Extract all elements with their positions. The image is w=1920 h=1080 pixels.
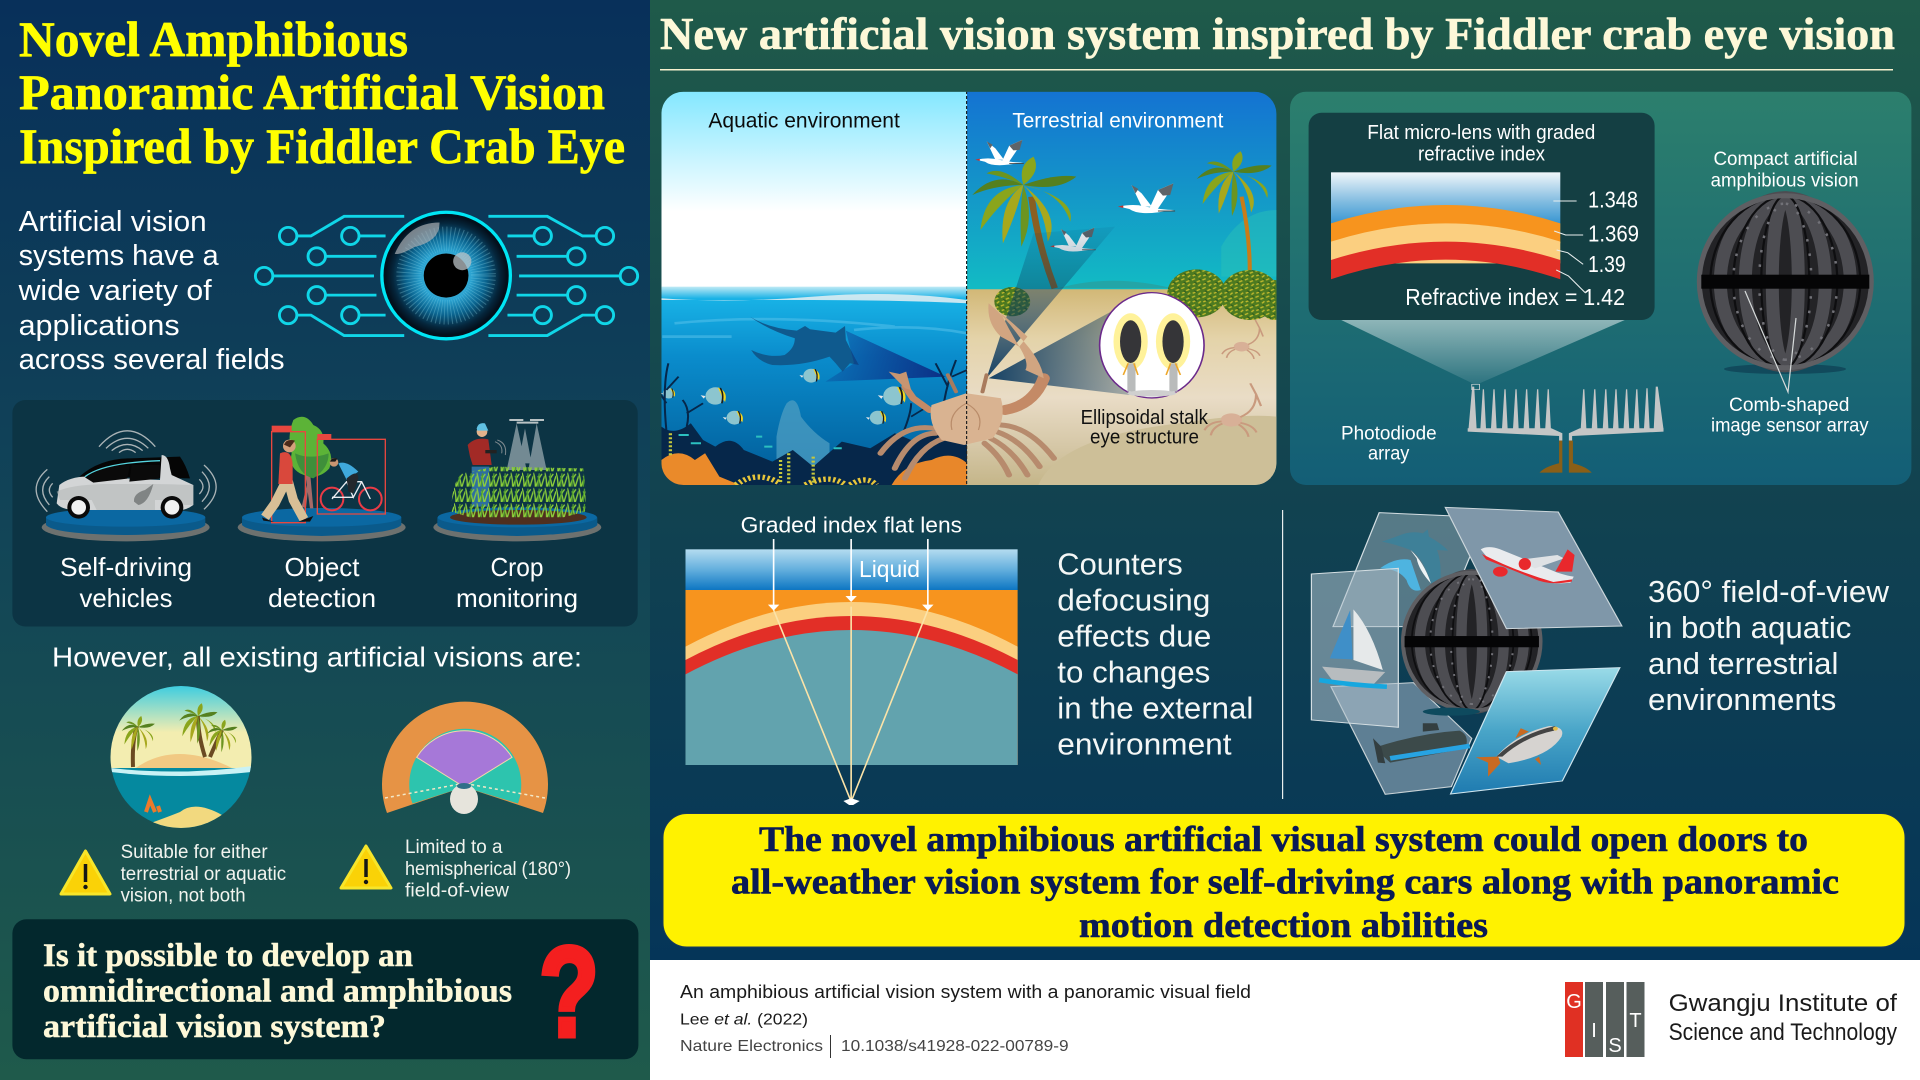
label: flat micro-lens [1367, 122, 1595, 166]
title [19, 11, 625, 174]
citation: Nature Electronics [680, 1038, 823, 1055]
intro text: systems have a [19, 240, 219, 272]
text: 360 field of view: environments [1648, 682, 1836, 717]
text: warning 2: hemispherical (180°) [405, 859, 571, 880]
small crabs [1204, 320, 1263, 437]
logo: GIST [1565, 982, 1644, 1057]
icon: self-driving car [36, 431, 216, 541]
lens layers [1331, 172, 1585, 293]
label: comb-shaped: Comb-shaped [1729, 395, 1849, 416]
fiddler crab [881, 303, 1054, 478]
central sphere [1401, 571, 1542, 712]
intro text: wide variety of [18, 275, 213, 307]
view: plane [1445, 507, 1622, 629]
text: warning 1: vision, not both [121, 886, 246, 906]
bushes [994, 269, 1291, 320]
label: photodiode array [1341, 424, 1437, 464]
label: crop monitoring: monitoring [456, 583, 578, 613]
citation: Lee et al. (2022) [680, 1012, 808, 1028]
text: 360 field of view: and terrestrial [1648, 646, 1838, 681]
text: warning 2 [405, 837, 571, 902]
panel: aquatic and terrestrial scene [658, 91, 1291, 487]
label: aquatic environment: Aquatic environment [708, 110, 900, 132]
refractive index values: 1.348 [1588, 186, 1638, 212]
title: Novel Amphibious [19, 11, 408, 67]
callout: conclusion banner [663, 814, 1905, 947]
intro text [18, 206, 285, 376]
icon: crop monitoring [433, 420, 601, 541]
sky: terrestrial side [967, 92, 1277, 292]
chart: hemispherical field of view [382, 702, 548, 814]
text: warning 2: Limited to a [405, 837, 503, 858]
label: photodiode array: Photodiode [1341, 424, 1437, 444]
logo: GIST: S [1608, 1035, 1622, 1057]
text: counters defocusing: environment [1057, 726, 1232, 762]
refractive index values: 1.39 [1588, 251, 1626, 277]
label: liquid: Liquid [859, 556, 920, 582]
label: flat micro-lens: Flat micro-lens with graded [1367, 122, 1595, 144]
view: dolphin [1333, 513, 1486, 627]
view: fish [1451, 668, 1620, 794]
label: graded index: Graded index flat lens [741, 513, 962, 538]
text: counters defocusing: defocusing [1057, 582, 1210, 618]
citation [680, 982, 1251, 1058]
text: warning 1: terrestrial or aquatic [121, 864, 286, 885]
citation: 10.1038/s41928-022-00789-9 [841, 1038, 1069, 1055]
label: terrestrial environment: Terrestrial environment [1012, 110, 1224, 132]
institute name [1669, 990, 1897, 1046]
question text: omnidirectional and amphibious [43, 974, 512, 1010]
icon: object detection [238, 417, 406, 541]
callout: conclusion banner: The novel amphibious artificial visual system could open doors to [759, 819, 1808, 859]
label: compact vision: amphibious vision [1711, 170, 1859, 192]
text: 360 field of view [1648, 574, 1890, 717]
title: Panoramic Artificial Vision [19, 64, 605, 120]
beach [967, 289, 1277, 487]
refractive index values: 1.369 [1588, 220, 1639, 246]
manta ray [750, 317, 859, 372]
question text: Is it possible to develop an [43, 938, 413, 974]
divider [966, 92, 968, 484]
label: self-driving vehicles: vehicles [80, 583, 172, 613]
text: counters defocusing: Counters [1057, 546, 1183, 582]
logo: GIST: G [1566, 991, 1582, 1013]
diagram: 360 view [1311, 507, 1622, 794]
palm trees [972, 151, 1272, 288]
label: compact vision: Compact artificial [1714, 149, 1858, 170]
label: self-driving vehicles: Self-driving [60, 552, 192, 582]
photodiode comb [1468, 384, 1664, 473]
page background: right column [650, 0, 1920, 960]
label: photodiode array: array [1368, 444, 1410, 464]
institute name: Gwangju Institute of [1669, 990, 1897, 1017]
icon: compact sphere [1697, 194, 1873, 392]
panel: lens and sensor [1290, 92, 1911, 485]
icon: circuit eye [255, 212, 638, 339]
label: ellipsoidal stalk: eye structure [1090, 426, 1199, 448]
label: comb-shaped: image sensor array [1711, 416, 1869, 436]
label: flat micro-lens: refractive index [1418, 144, 1545, 166]
birds [975, 140, 1175, 252]
inset: ellipsoidal eye [1100, 293, 1204, 398]
intro text: applications [19, 310, 180, 342]
view: submarine [1331, 683, 1472, 794]
icon: island [110, 686, 252, 830]
title: Inspired by Fiddler Crab Eye [19, 118, 625, 174]
text: counters defocusing: to changes [1057, 654, 1210, 690]
text: 360 field of view: in both aquatic [1648, 610, 1851, 645]
label: comb-shaped [1711, 395, 1869, 436]
text: counters defocusing: effects due [1057, 618, 1211, 654]
text: warning 1 [121, 842, 286, 906]
label: object detection: Object [284, 552, 360, 582]
icon: warning 1 [61, 851, 110, 894]
coral reef [658, 360, 967, 487]
diagram: graded index lens [685, 513, 1018, 805]
panel: micro-lens [1309, 113, 1655, 320]
view cone: aquatic [825, 331, 946, 382]
footer [650, 960, 1920, 1080]
main heading: New artificial vision system inspired by Fiddler crab eye vision [660, 8, 1895, 59]
label: compact vision [1711, 149, 1859, 192]
logo: GIST: T [1629, 1010, 1642, 1032]
citation: An amphibious artificial vision system with a panoramic visual field [680, 982, 1251, 1002]
text: counters defocusing [1057, 546, 1253, 762]
page background: left column [0, 0, 650, 1080]
label: ellipsoidal stalk: Ellipsoidal stalk [1081, 407, 1209, 429]
label: object detection [268, 552, 376, 613]
view: boat [1311, 568, 1398, 727]
icon: warning 2 [341, 846, 391, 888]
refractive index values: Refractive index = 1.42 [1405, 284, 1625, 310]
label: self-driving vehicles [60, 552, 192, 613]
text: counters defocusing: in the external [1057, 690, 1253, 726]
text: 360 field of view: 360° field-of-view [1648, 574, 1890, 609]
reef fish [660, 369, 906, 425]
sea [661, 287, 967, 487]
intro text: Artificial vision [19, 206, 207, 238]
icon: question mark: ? [539, 921, 599, 1064]
refractive index values [1405, 186, 1639, 310]
text: warning 1: Suitable for either [121, 842, 268, 863]
heading: limitations: However, all existing artificial visions are: [52, 642, 582, 672]
intro text: across several fields [19, 344, 285, 376]
label: ellipsoidal stalk [1081, 407, 1209, 448]
question text [43, 938, 512, 1045]
view cones [987, 227, 1129, 395]
callout: conclusion banner: all-weather vision system for self-driving cars along with panoramic [731, 862, 1839, 902]
label: object detection: detection [268, 583, 376, 613]
sky: aquatic side [661, 92, 967, 292]
logo: GIST: I [1591, 1020, 1597, 1042]
label: crop monitoring: Crop [490, 552, 544, 582]
question text: artificial vision system? [43, 1009, 386, 1045]
zoom cone [1341, 320, 1625, 385]
label: crop monitoring [456, 552, 578, 613]
panel: applications [12, 400, 638, 626]
callout: conclusion banner: motion detection abilities [1079, 905, 1488, 945]
text: warning 2: field-of-view [405, 880, 509, 902]
panel: question [12, 919, 638, 1064]
